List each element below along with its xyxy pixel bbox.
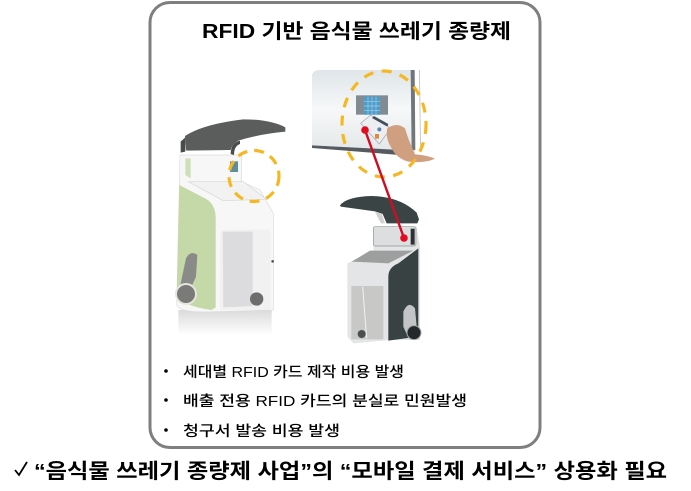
canopy <box>185 119 285 151</box>
wall panel <box>312 70 415 157</box>
arrow: red connector from reader to dark machine <box>361 126 408 242</box>
illustration: dark food waste machine <box>340 196 421 343</box>
pedal <box>403 305 417 340</box>
tray <box>352 251 413 263</box>
card <box>361 115 391 144</box>
highlight: dashed circle on green machine <box>229 150 279 202</box>
card reader <box>230 161 238 172</box>
door opening <box>220 229 271 310</box>
illustration: green food waste machine <box>176 119 285 335</box>
icon: check mark <box>15 462 27 475</box>
door <box>351 286 383 339</box>
highlight: dashed circle on card reader <box>342 71 426 177</box>
bullet 1: 세대별 RFID 카드 제작 비용 발생 <box>183 364 404 381</box>
conclusion statement: “음식물 쓰레기 종량제 사업”의 “모바일 결제 서비스” 상용화 필요 <box>34 460 667 483</box>
body <box>347 227 420 343</box>
hand <box>387 125 435 162</box>
bullet 3: 청구서 발송 비용 발생 <box>183 423 340 440</box>
top tray <box>188 182 267 201</box>
bullet 2: 배출 전용 RFID 카드의 분실로 민원발생 <box>183 393 467 410</box>
dark side panel <box>388 248 418 341</box>
reflection <box>178 310 272 335</box>
title: RFID 기반 음식물 쓰레기 종량제 <box>202 20 511 43</box>
illustration: card reader close-up <box>312 70 435 162</box>
panel: RFID system frame <box>150 2 540 448</box>
pedal <box>180 253 197 290</box>
canopy <box>340 196 419 223</box>
green side panel <box>177 185 216 310</box>
body <box>177 155 273 312</box>
bullet list <box>164 364 467 440</box>
keypad <box>356 95 388 115</box>
reader box <box>373 227 416 246</box>
